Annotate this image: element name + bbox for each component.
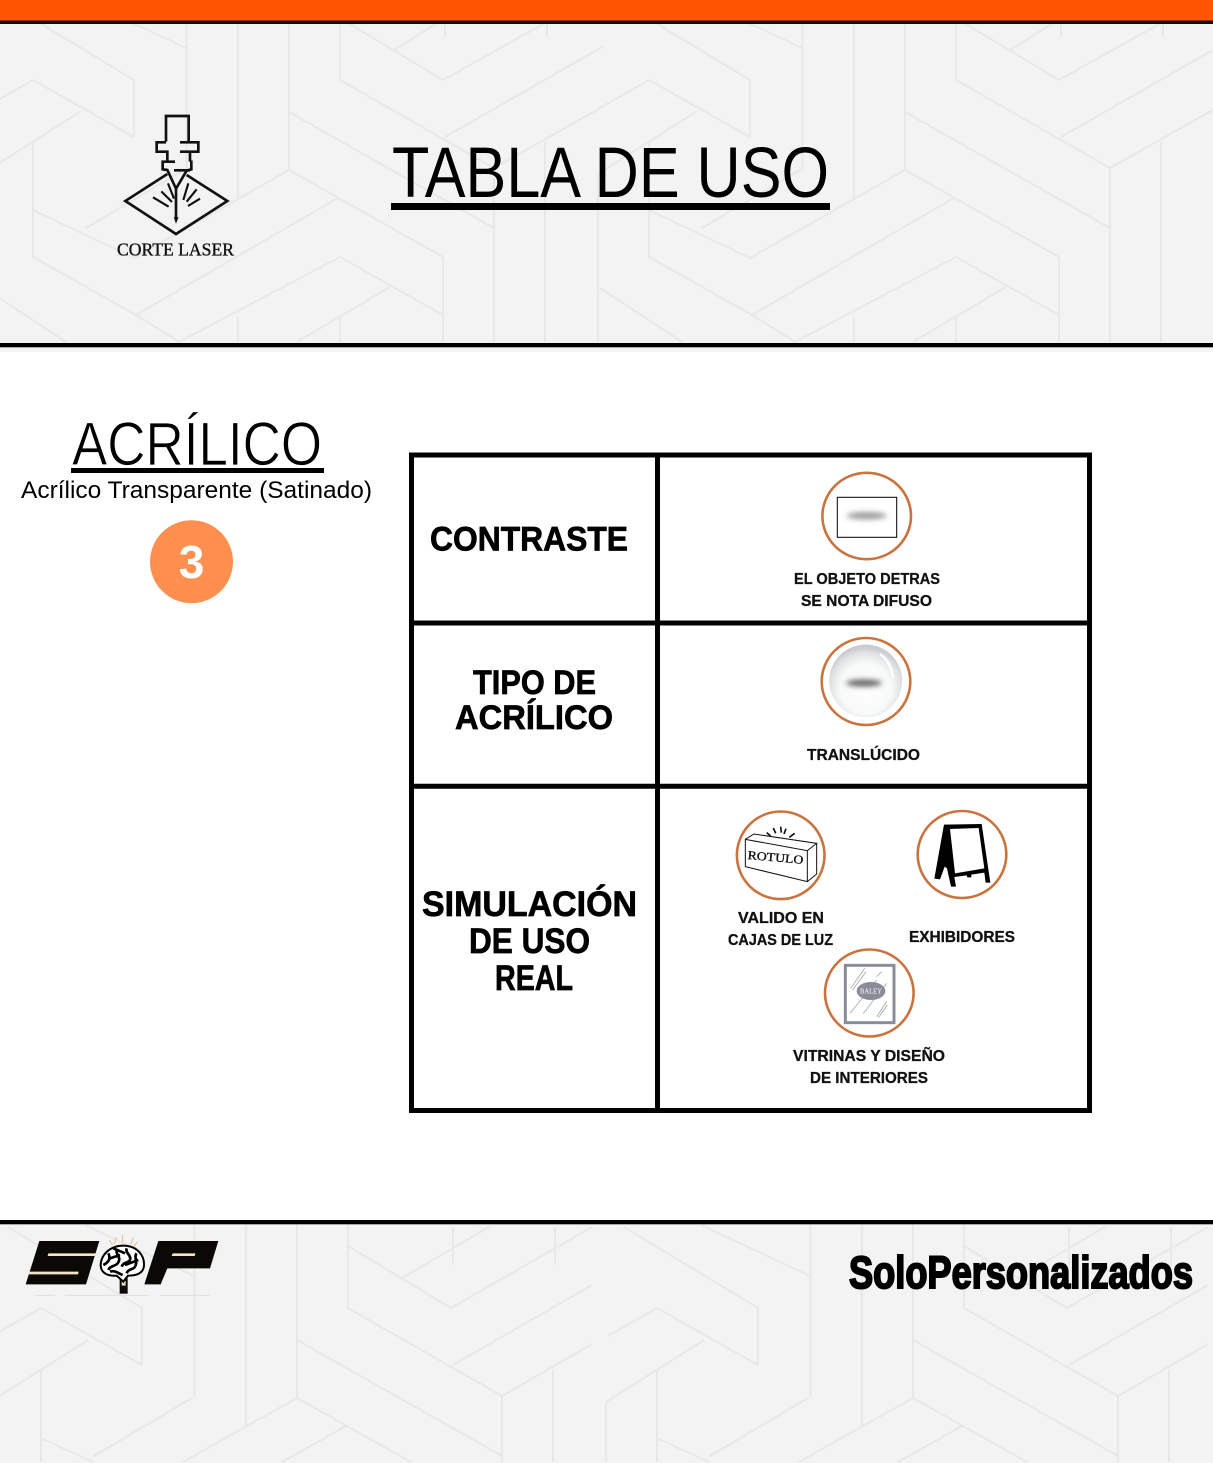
title: TABLA DE USO xyxy=(392,134,829,213)
row label: tipo de acrilico: ACRÍLICO xyxy=(455,699,613,737)
logo caption: CORTE LASER xyxy=(117,240,234,260)
number badge xyxy=(150,520,233,603)
label: cajas de luz: VALIDO EN xyxy=(738,910,824,927)
label: objeto difuso xyxy=(794,571,940,610)
top orange bar xyxy=(0,0,1213,24)
row label: simulacion de uso real: DE USO xyxy=(469,922,590,961)
number badge: 3 xyxy=(179,536,204,588)
material subtitle: Acrílico Transparente (Satinado) xyxy=(21,477,372,504)
label: objeto difuso: EL OBJETO DETRAS xyxy=(794,571,940,588)
icon: rotulo light box xyxy=(737,812,824,899)
icon: diffuse object xyxy=(822,473,911,559)
icon: corte laser logo xyxy=(117,116,234,259)
label: vitrinas: VITRINAS Y DISEÑO xyxy=(793,1045,945,1065)
label: cajas de luz: CAJAS DE LUZ xyxy=(728,932,833,949)
icon: translucent sphere xyxy=(822,638,910,725)
label: cajas de luz xyxy=(728,910,833,949)
icon: a-frame display xyxy=(918,811,1006,898)
footer band xyxy=(0,1220,1213,1463)
label: exhibidores: EXHIBIDORES xyxy=(909,929,1015,946)
usage table grid xyxy=(412,455,1090,1110)
icon: SP brain logo xyxy=(26,1235,218,1295)
label: vitrinas: DE INTERIORES xyxy=(810,1070,928,1087)
row label: simulacion de uso real: SIMULACIÓN xyxy=(422,884,637,924)
label: objeto difuso: SE NOTA DIFUSO xyxy=(801,593,932,610)
icon: shop window: BALEY xyxy=(860,988,882,996)
icon: shop window xyxy=(825,950,914,1036)
row label: tipo de acrilico xyxy=(455,664,613,737)
label: vitrinas xyxy=(793,1045,945,1087)
row label: contraste: CONTRASTE xyxy=(430,520,628,558)
row label: simulacion de uso real: REAL xyxy=(495,959,573,998)
header band xyxy=(0,0,1213,352)
label: translucido: TRANSLÚCIDO xyxy=(807,745,920,764)
icon: rotulo light box: ROTULO xyxy=(747,848,804,867)
row label: simulacion de uso real xyxy=(422,884,637,998)
material heading: ACRÍLICO xyxy=(72,410,322,478)
row label: tipo de acrilico: TIPO DE xyxy=(473,664,596,702)
